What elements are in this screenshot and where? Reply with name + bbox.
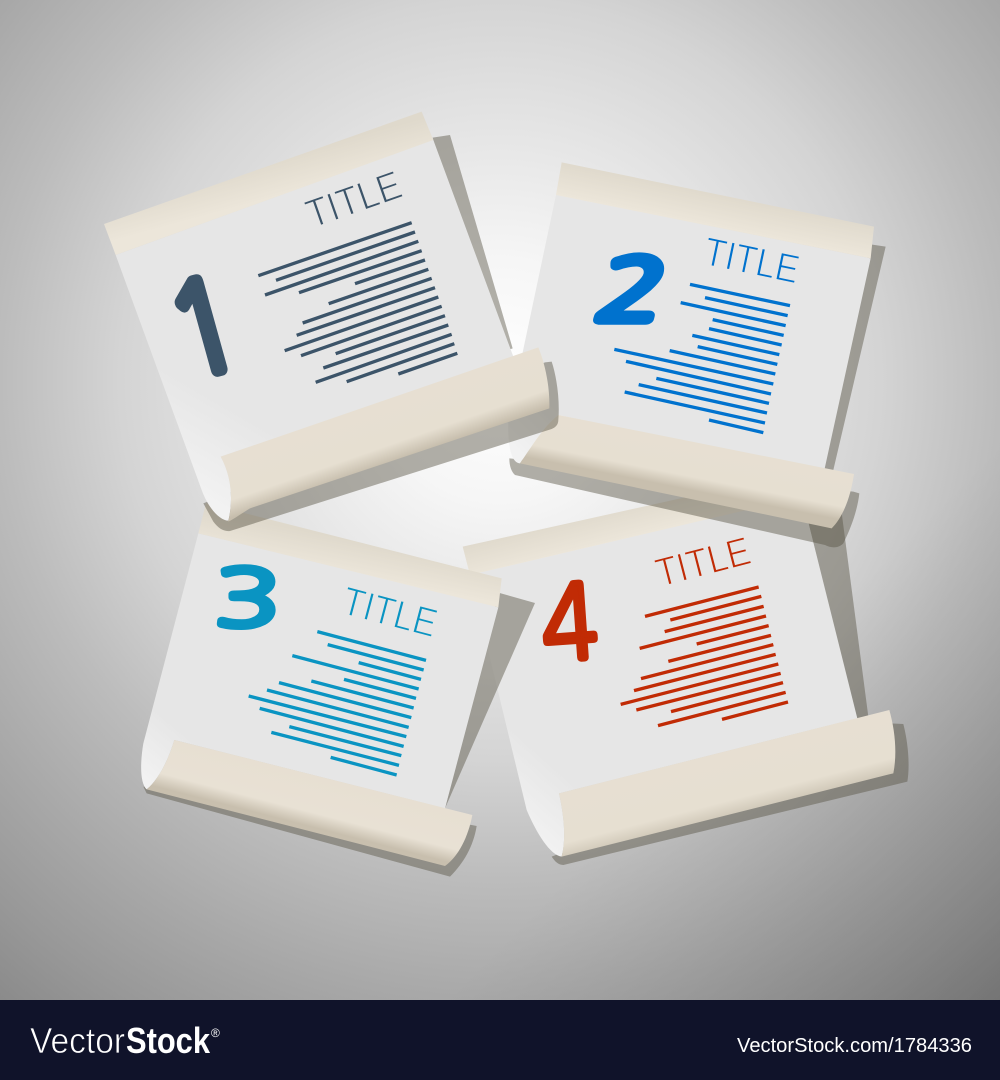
footer logo: Vector bbox=[30, 1020, 125, 1061]
footer logo bbox=[30, 1020, 220, 1061]
panel: card 3 bbox=[141, 503, 535, 877]
card 2 paper bbox=[508, 162, 886, 547]
panel: card 1 bbox=[104, 112, 559, 531]
footer logo: Stock bbox=[126, 1020, 211, 1061]
card 3 text lines bbox=[249, 632, 426, 775]
card 4 text lines bbox=[621, 587, 788, 726]
card 2 text lines bbox=[614, 284, 790, 433]
card 1 title: TITLE bbox=[300, 163, 407, 237]
footer bar bbox=[0, 1000, 1000, 1080]
card 4 title: TITLE bbox=[651, 529, 755, 596]
card 2 title: TITLE bbox=[700, 230, 803, 292]
card 4 number: 4 bbox=[538, 570, 601, 676]
card 4 bottom fold bbox=[559, 710, 895, 857]
card 1 number: 1 bbox=[156, 259, 252, 398]
card 1 text lines bbox=[258, 223, 457, 382]
card 3 title: TITLE bbox=[338, 579, 442, 646]
card 1 bottom fold bbox=[221, 347, 549, 522]
card 1 paper bbox=[104, 112, 559, 531]
footer image id: VectorStock.com/1784336 bbox=[737, 1035, 972, 1057]
card 4 paper bbox=[463, 473, 909, 865]
footer logo: ® bbox=[211, 1026, 220, 1040]
card 3 bottom fold bbox=[147, 740, 472, 866]
card 3 paper bbox=[141, 503, 535, 877]
panel: card 2 bbox=[508, 162, 886, 547]
card 3 number: 3 bbox=[214, 559, 281, 637]
panel: card 4 bbox=[463, 473, 909, 865]
card 2 number: 2 bbox=[589, 249, 676, 333]
card 2 bottom fold bbox=[520, 415, 854, 528]
